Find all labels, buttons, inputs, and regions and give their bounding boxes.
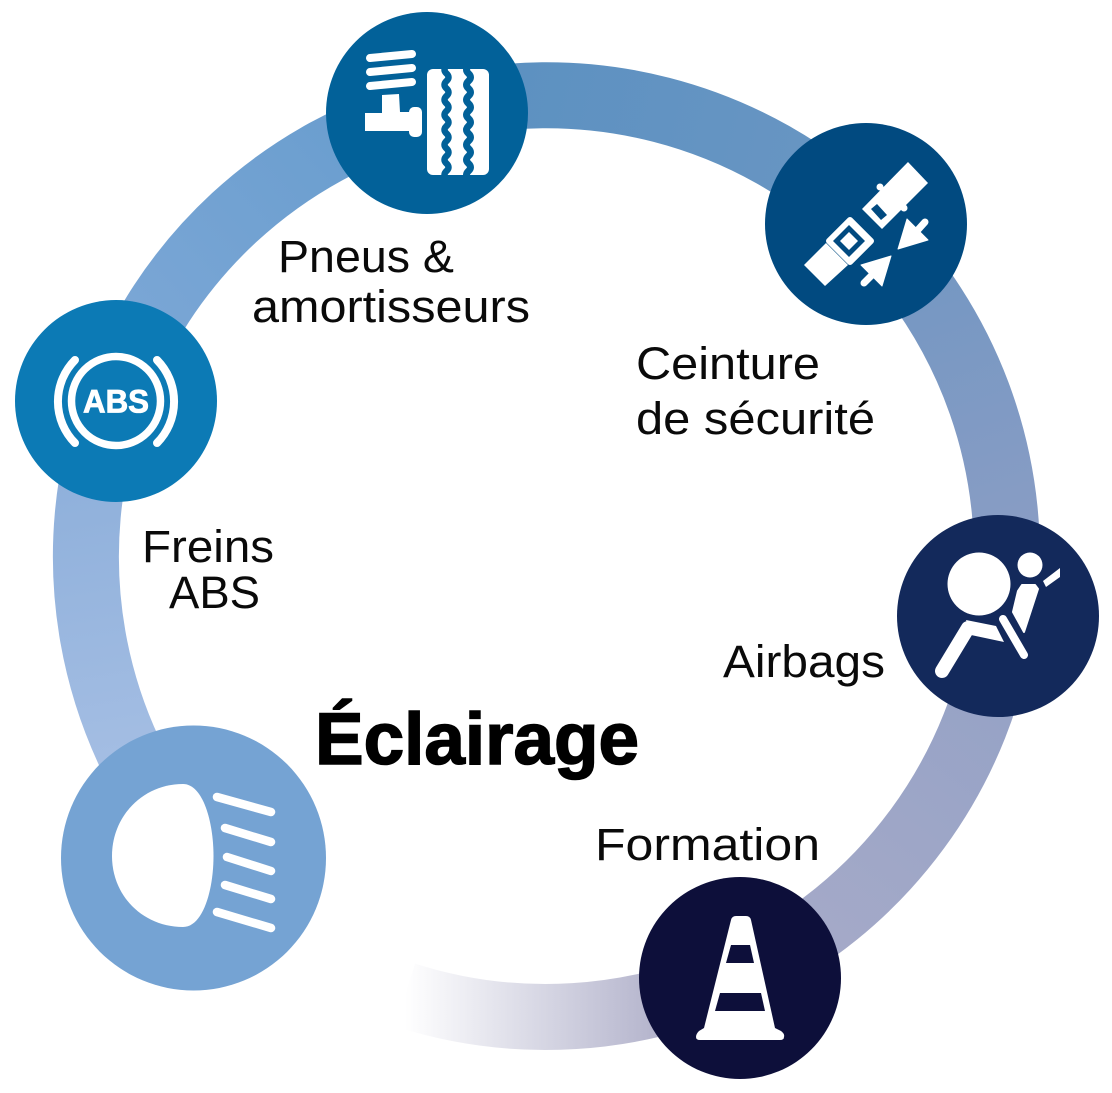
label: Ceinture de sécurité [636, 338, 875, 444]
icon: airbag [897, 515, 1099, 717]
label: Pneus & amortisseurs: Pneus & [278, 231, 454, 282]
label: Airbags: Airbags [723, 636, 885, 687]
icon: tyres and shock absorber [326, 12, 528, 214]
icon: headlight [61, 726, 326, 990]
icon: traffic cone [639, 877, 841, 1079]
icon: ABS brakes: ABS [83, 384, 149, 420]
label: Freins ABS: ABS [169, 567, 260, 618]
label: Pneus & amortisseurs [252, 231, 530, 332]
label: Formation: Formation [595, 819, 820, 870]
label: Freins ABS: Freins [142, 521, 274, 572]
heading: Éclairage: Éclairage [315, 699, 639, 780]
label: Pneus & amortisseurs: amortisseurs [252, 281, 530, 332]
ring: gradient circular band [86, 95, 1007, 1017]
icon: ABS brakes [15, 300, 217, 502]
icon: seat belt [765, 123, 967, 325]
label: Freins ABS [142, 521, 274, 618]
label: Ceinture de sécurité: Ceinture [636, 338, 820, 389]
label: Ceinture de sécurité: de sécurité [636, 393, 875, 444]
